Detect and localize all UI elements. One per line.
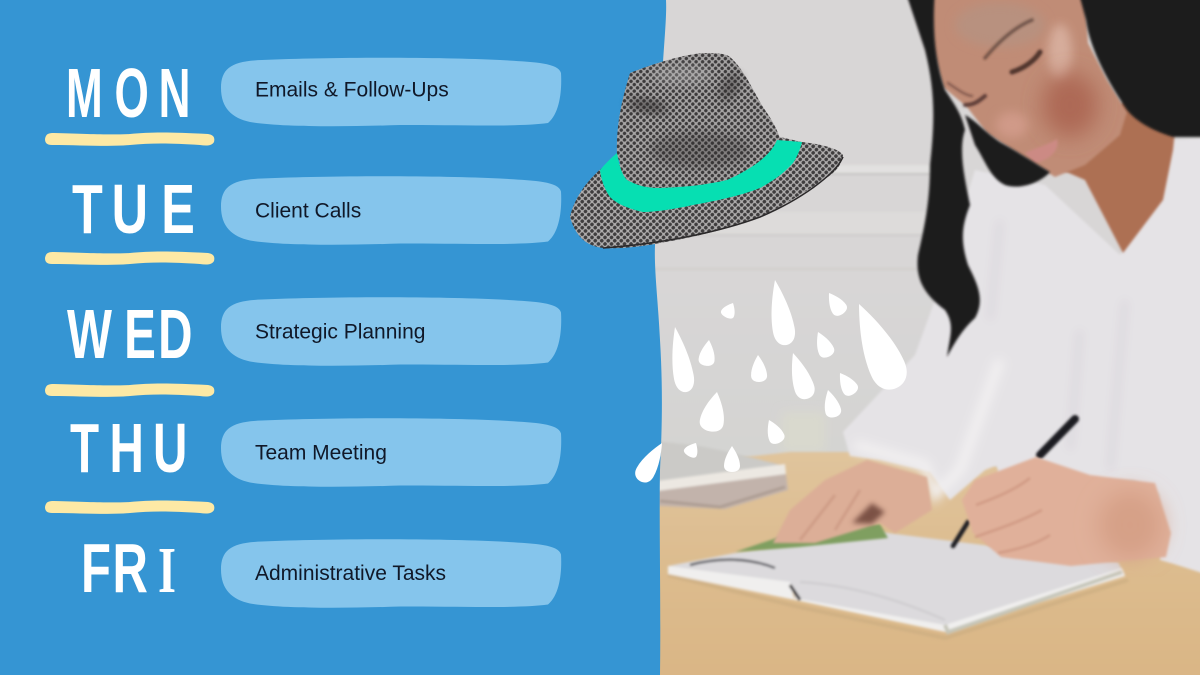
row: Wednesday bbox=[67, 295, 561, 373]
photo backdrop: wall with moulding bbox=[630, 0, 1200, 490]
row: Friday bbox=[81, 528, 561, 608]
task pill: Client Calls: Client Calls bbox=[255, 200, 361, 222]
hat band bbox=[600, 140, 802, 212]
photo: brows and eyes bbox=[948, 20, 1040, 105]
photo: neck bbox=[1062, 100, 1175, 253]
icon: white rain drops bbox=[632, 278, 913, 486]
task pill: Strategic Planning bbox=[221, 297, 561, 366]
task pill: Client Calls bbox=[221, 176, 561, 245]
icon: halftone hat bbox=[570, 53, 843, 248]
task pill: Administrative Tasks bbox=[221, 539, 561, 608]
row: Tuesday bbox=[72, 170, 561, 248]
row: Thursday bbox=[70, 409, 561, 487]
task pill: Emails and Follow-Ups bbox=[221, 58, 561, 126]
photo: mug bbox=[782, 412, 825, 452]
hat brim bbox=[570, 137, 843, 248]
task pill: Administrative Tasks: Administrative Tasks bbox=[255, 562, 446, 585]
day heading: THU: THU bbox=[70, 409, 187, 487]
day heading: FRI: FRI bbox=[81, 528, 176, 607]
day heading: TUE: TUE bbox=[72, 170, 195, 248]
underline: Wednesday bbox=[45, 384, 214, 397]
panel: blue background bbox=[0, 0, 666, 675]
underline: Tuesday bbox=[45, 252, 214, 265]
photo: left hand bbox=[773, 460, 932, 543]
underline: Monday bbox=[45, 132, 214, 146]
photo: right hand bbox=[962, 457, 1171, 566]
photo: notebook bbox=[668, 532, 1128, 638]
task pill: Emails and Follow-Ups: Emails & Follow-Ups bbox=[255, 78, 449, 102]
photo: shirt bbox=[843, 137, 1200, 582]
day heading: WED: WED bbox=[67, 295, 192, 373]
task pill: Team Meeting: Team Meeting bbox=[255, 442, 387, 464]
photo: woman writing in a notebook at a desk bbox=[630, 0, 1200, 675]
photo: hair bbox=[905, 0, 1200, 357]
day heading: MON: MON bbox=[66, 55, 190, 133]
row: Monday bbox=[66, 55, 561, 133]
photo: pen bbox=[953, 419, 1075, 546]
photo: phone and tablet bbox=[640, 442, 788, 509]
photo: green strip on notebook bbox=[735, 524, 888, 552]
photo: face bbox=[930, 0, 1127, 177]
underline: Thursday bbox=[45, 500, 214, 514]
hat crown bbox=[617, 53, 782, 190]
photo: table bbox=[630, 452, 1200, 675]
task pill: Team Meeting bbox=[221, 418, 561, 487]
photo: lips bbox=[1025, 139, 1058, 163]
task pill: Strategic Planning: Strategic Planning bbox=[255, 320, 425, 344]
